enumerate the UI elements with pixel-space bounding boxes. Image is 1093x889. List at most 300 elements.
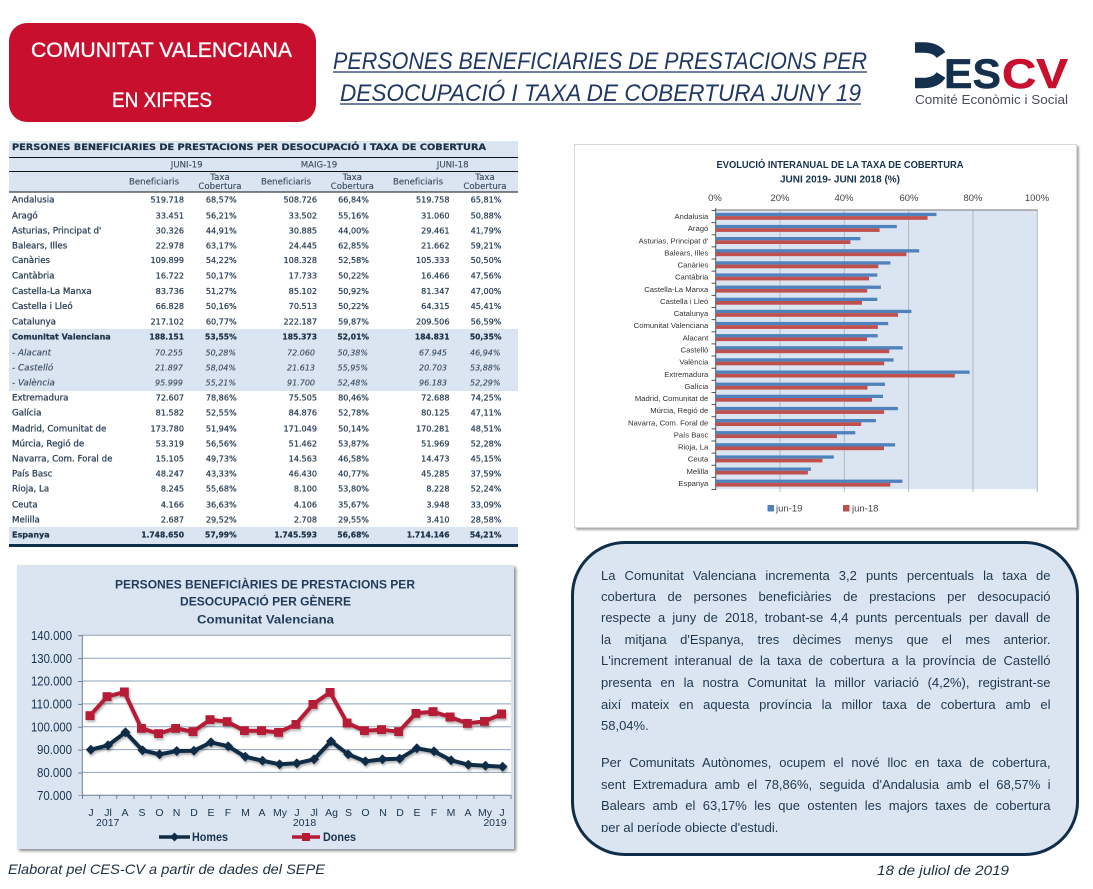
text block: commentary paragraph 2: Balears amb el 63,17% les que ostenten les majors taxes de cobertura [601, 798, 1050, 813]
header badge: Comunitat Valenciana en xifres: COMUNITAT VALENCIANA [31, 39, 292, 62]
bars: Múrcia [650, 406, 898, 415]
text block: commentary paragraph 1: cobertura de persones beneficiàries de prestacions per desocupació [601, 589, 1050, 604]
bars: Andalusia: Andalusia [675, 212, 709, 221]
row: Múrcia [12, 438, 502, 450]
row: Castella-La Manxa: 83.736 [156, 286, 184, 296]
table column headers: JUNI-18 [436, 160, 469, 170]
text block: commentary paragraph 1: així mateix en aquesta província la millor taxa de cobertura amb el [601, 697, 1050, 712]
footer: source and date: Elaborat pel CES-CV a partir de dades del SEPE [8, 861, 326, 877]
row: Castelló: - Castelló [12, 362, 54, 374]
table column headers: Beneficiaris [129, 178, 180, 188]
row: Madrid: 50,14% [338, 424, 369, 434]
row: Ceuta: 33,09% [471, 500, 502, 510]
row: Múrcia: 53.319 [156, 438, 184, 448]
row: Navarra: Navarra, Com. Foral de [12, 454, 112, 464]
row: Alacant: - Alacant [12, 348, 52, 358]
line chart x axis labels: A [121, 807, 129, 819]
row: València: 55,21% [205, 378, 236, 388]
bar chart percent axis [708, 193, 1050, 204]
line chart y axis labels: 70.000 [37, 789, 72, 803]
line chart x axis labels: My [273, 807, 288, 819]
row: Ceuta: 35,67% [338, 500, 369, 510]
footer: source and date: 18 de juliol de 2019 [877, 862, 1009, 878]
row: Galícia: 47,11% [471, 408, 502, 418]
row: Balears: 59,21% [471, 240, 502, 250]
row: Canàries: 50,50% [471, 255, 502, 265]
row: Navarra: 14.473 [421, 454, 450, 464]
row: Rioja: 55,68% [206, 484, 237, 494]
line chart x axis labels: A [258, 807, 266, 819]
bar chart legend: jun-19 [775, 504, 802, 514]
row: Castella-La Manxa [12, 286, 502, 297]
row: Cantàbria: Cantàbria [12, 272, 54, 282]
bars: Andalusia [675, 212, 936, 221]
bar chart percent axis: 0% [708, 193, 722, 204]
row: Aragó: 56,21% [206, 210, 237, 220]
row: Castella i Lleó: 50,16% [206, 301, 237, 311]
bars: Navarra [628, 418, 876, 427]
row: València: 95.999 [155, 378, 183, 388]
row: Navarra: 49,73% [206, 454, 237, 464]
table column headers: Cobertura [198, 182, 242, 192]
row: País Basc: 37,59% [471, 468, 502, 478]
row: Castella i Lleó [12, 301, 502, 312]
bar chart percent axis: 100% [1025, 193, 1050, 204]
line chart x axis labels: J [88, 807, 94, 819]
bars: Rioja [678, 442, 895, 452]
row: Canàries: 52,58% [338, 255, 369, 265]
row: Extremadura: 72.688 [421, 392, 450, 402]
line chart x axis labels: J [294, 807, 300, 819]
row: Castella-La Manxa: 50,92% [338, 286, 369, 296]
line chart y axis labels: 110.000 [31, 698, 72, 712]
line chart x axis labels: 2019 [483, 817, 507, 829]
row: Múrcia: 53,87% [338, 438, 369, 448]
line chart title: PERSONES BENEFICIÀRIES DE PRESTACIONS PER [115, 576, 415, 592]
row: Alacant: 50,28% [205, 348, 236, 358]
bars: Castella-La Manxa: Castella-La Manxa [644, 285, 709, 294]
bars: Melilla [687, 467, 811, 476]
text block: commentary paragraph 2: Per Comunitats Autònomes, ocupem el nové lloc en taxa de cobertura, [601, 755, 1050, 770]
bars: Galícia: Galícia [684, 382, 709, 391]
row: Espanya: 1.745.593 [274, 530, 317, 540]
row: Aragó: 33.451 [156, 210, 184, 220]
row: Aragó: 33.502 [289, 210, 317, 220]
row: Catalunya: 217.102 [151, 316, 184, 326]
table column headers: Taxa [474, 173, 495, 183]
row: Catalunya: 56,59% [471, 316, 502, 326]
row: Ceuta: 36,63% [206, 500, 237, 510]
row: Navarra: 15.105 [156, 454, 184, 464]
table title: PERSONES BENEFICIARIES DE PRESTACIONS PER DESOCUPACIÓ I TAXA DE COBERTURA [12, 141, 487, 152]
line chart x axis labels: J [499, 807, 505, 819]
line chart legend: Homes: Homes [192, 832, 228, 844]
bars: Catalunya [674, 309, 911, 318]
text block: commentary paragraph 2: sent Extremadura amb el 78,86%, seguida d'Andalusia amb el 68,57% i [601, 777, 1050, 792]
line chart y axis labels [31, 629, 72, 803]
row: Espanya [12, 530, 502, 540]
row: Andalusia: 65,81% [471, 194, 502, 204]
bars: Castella-La Manxa [644, 285, 881, 294]
panel: line chart background [17, 565, 514, 849]
row: País Basc: 46.430 [289, 468, 317, 478]
row: Canàries: 108.328 [284, 255, 317, 265]
row: Extremadura: 72.607 [156, 392, 184, 402]
row: Balears [12, 240, 502, 252]
row: Andalusia: Andalusia [12, 196, 54, 206]
row: Comunitat Valenciana: 53,55% [205, 332, 237, 342]
line chart x axis labels: F [431, 807, 437, 819]
row: Asturias: Asturias, Principat d' [12, 226, 101, 236]
row: Andalusia: 508.726 [284, 194, 317, 204]
text block: commentary paragraph 1 [601, 568, 1050, 733]
row: Ceuta [12, 500, 502, 510]
bars: Canàries: Canàries [678, 261, 708, 270]
line series: Dones [90, 692, 502, 734]
row: Rioja: 8.100 [294, 484, 317, 494]
line chart x axis labels: S [138, 807, 146, 819]
line chart x axis labels: O [361, 807, 370, 819]
row: Castelló: 53,88% [470, 364, 500, 372]
row: Madrid: 171.049 [284, 424, 317, 434]
line chart x axis labels [88, 807, 507, 829]
row: Canàries: 105.333 [416, 255, 450, 265]
row: Castella i Lleó: 70.513 [289, 301, 317, 311]
bars: Castelló: Castelló [681, 346, 708, 354]
row: Castelló: 55,95% [337, 364, 368, 372]
text block: commentary paragraph 1: L'increment interanual de la taxa de cobertura a la província de Castelló [601, 653, 1050, 668]
text block: commentary paragraph 2 [601, 755, 1050, 832]
row: Navarra: 14.563 [289, 454, 317, 464]
row: Múrcia: Múrcia, Regió de [12, 438, 84, 450]
bar chart percent axis: 60% [899, 193, 919, 204]
row: Comunitat Valenciana: 50,35% [470, 332, 502, 342]
line chart y axis labels: 80.000 [37, 766, 72, 780]
table column headers: Beneficiaris [261, 178, 312, 188]
row: València: 52,48% [337, 378, 368, 388]
row: Balears: 24.445 [289, 240, 317, 250]
bars: Espanya: Espanya [678, 479, 709, 488]
row: Alacant: 50,38% [337, 348, 368, 358]
row: Melilla: 28,58% [471, 514, 502, 524]
row: Canàries [12, 255, 502, 266]
row: Navarra: 46,58% [338, 454, 369, 464]
row: Madrid: 173.780 [151, 424, 184, 434]
bars: Asturias [638, 236, 860, 245]
bar chart title [716, 158, 964, 186]
row: Asturias: 30.885 [289, 226, 317, 236]
row: Comunitat Valenciana: 52,01% [337, 332, 369, 342]
row: Catalunya: 209.506 [416, 316, 450, 326]
row: Melilla: 29,55% [338, 514, 369, 524]
row: Andalusia [12, 194, 502, 206]
row: Extremadura: 75.505 [289, 392, 317, 402]
bars: Extremadura [664, 370, 970, 379]
row: Ceuta: Ceuta [12, 500, 38, 510]
main title: PERSONES BENEFICIARIES DE PRESTACIONS PER [333, 48, 867, 75]
row: Múrcia: 51.969 [421, 438, 450, 448]
row: Catalunya: 59,87% [338, 316, 369, 326]
row: Castella-La Manxa: 51,27% [206, 286, 237, 296]
bars: Múrcia: Múrcia, Regió de [650, 406, 708, 415]
row: Catalunya [12, 316, 502, 328]
row: Rioja: 53,80% [338, 484, 369, 494]
table column headers: MAIG-19 [301, 160, 337, 170]
row: Melilla [12, 514, 502, 526]
row: País Basc: 43,33% [206, 468, 237, 478]
bars: Melilla: Melilla [687, 467, 709, 476]
bar chart title: EVOLUCIÓ INTERANUAL DE LA TAXA DE COBERTURA [716, 158, 964, 171]
bar chart legend: jun-18 [851, 504, 878, 514]
table column headers: Cobertura [463, 182, 507, 192]
row: Ceuta: 3.948 [426, 500, 450, 510]
row: Galícia: 52,78% [338, 408, 369, 418]
bars: Alacant [683, 333, 878, 342]
line chart x axis labels: O [155, 807, 164, 819]
row: Extremadura: 74,25% [471, 392, 502, 402]
row: Andalusia: 519.758 [416, 194, 450, 204]
row: Castelló: 20.703 [419, 364, 447, 372]
text block: commentary paragraph 1: presenta en la nostra Comunitat la millor variació (4,2%), registrant-se [601, 675, 1050, 690]
table column headers: Beneficiaris [393, 178, 444, 188]
bar chart title: JUNI 2019- JUNI 2018 (%) [780, 174, 900, 186]
line chart y axis labels: 130.000 [31, 652, 72, 666]
bars: Madrid: Madrid, Comunitat de [635, 394, 708, 403]
row: Castella i Lleó: 66.828 [156, 301, 184, 311]
row: Catalunya: 222.187 [284, 316, 317, 326]
text block: commentary paragraph 1: respecte a juny de 2018, trobant-se 4,4 punts percentuals per davall de [601, 610, 1050, 625]
row: Cantàbria: 50,22% [338, 270, 369, 280]
row: Balears: 63,17% [206, 240, 237, 250]
bar chart percent axis: 80% [963, 193, 983, 204]
row: Cantàbria: 47,56% [471, 270, 502, 280]
row: Canàries: 54,22% [206, 255, 237, 265]
main title: DESOCUPACIÓ I TAXA DE COBERTURA JUNY 19 [340, 80, 861, 107]
table column headers [129, 160, 507, 192]
row: Alacant: 72.060 [287, 348, 315, 358]
row: Andalusia: 68,57% [206, 194, 237, 204]
row: València: - València [12, 378, 55, 388]
row: Madrid: 48,51% [471, 424, 502, 434]
row: Castella-La Manxa: 85.102 [289, 286, 317, 296]
line chart x axis labels: Ag [325, 807, 338, 819]
row: Canàries: Canàries [12, 256, 51, 266]
row: Rioja: 8.245 [161, 484, 184, 494]
row: Alacant: 67.945 [419, 348, 447, 358]
row: Galícia: Galícia [12, 408, 41, 418]
bars: Ceuta: Ceuta [688, 455, 709, 464]
row: Castella i Lleó: 50,22% [338, 301, 369, 311]
row: Castella i Lleó: 45,41% [471, 301, 502, 311]
row: Castella i Lleó: 64.315 [421, 301, 450, 311]
row: Balears: 21.662 [421, 240, 450, 250]
row: Múrcia: 51.462 [289, 438, 317, 448]
row: Castelló: 21.613 [287, 364, 315, 372]
line chart x axis labels: 2017 [96, 817, 120, 829]
row: Melilla: 3.410 [426, 514, 450, 524]
bars: Extremadura: Extremadura [664, 370, 709, 379]
row: Aragó: 55,16% [338, 210, 369, 220]
row: València: 52,29% [470, 378, 500, 388]
line chart x axis labels: D [190, 807, 198, 819]
row: Espanya: Espanya [12, 530, 50, 540]
bars: Espanya [678, 479, 902, 488]
row: Rioja: 52,24% [471, 484, 502, 494]
line chart y axis labels: 100.000 [31, 720, 72, 734]
bars: Navarra: Navarra, Com. Foral de [628, 418, 708, 427]
row: Balears: 62,85% [338, 240, 369, 250]
line chart x axis labels: Jl [310, 807, 318, 819]
row: Melilla: 2.708 [294, 514, 317, 524]
row: Extremadura: 78,86% [206, 392, 237, 402]
row: Alacant [12, 348, 500, 358]
line chart title [115, 576, 415, 626]
row: Múrcia: 52,28% [471, 438, 502, 448]
row: Espanya: 1.714.146 [407, 530, 450, 540]
logo: CES CV: ES [944, 50, 1001, 97]
row: Madrid: 170.281 [416, 424, 450, 434]
line chart x axis labels: A [464, 807, 472, 819]
line series: Homes [91, 732, 503, 767]
row: Aragó: 50,88% [471, 210, 502, 220]
text block: commentary paragraph 1: La Comunitat Valenciana incrementa 3,2 punts percentuals la taxa de [601, 568, 1050, 582]
row: Asturias: 44,91% [206, 226, 237, 236]
line chart x axis labels: E [413, 807, 421, 819]
row: Extremadura: 80,46% [338, 392, 369, 402]
row: Espanya: 56,68% [337, 530, 369, 540]
row: Múrcia: 56,56% [206, 438, 237, 448]
line chart y axis labels: 140.000 [31, 629, 72, 643]
row: Espanya: 1.748.650 [141, 530, 184, 540]
table column headers: Taxa [209, 173, 230, 183]
row: Navarra: 45,15% [471, 454, 502, 464]
text block: commentary paragraph 1: 58,04%. [601, 718, 649, 733]
row: Andalusia: 66,84% [338, 194, 369, 204]
line chart x axis labels: M [241, 807, 250, 819]
bars: País Basc: País Basc [674, 430, 708, 439]
line chart x axis labels: Jl [104, 807, 112, 819]
row: Comunitat Valenciana: 185.373 [282, 332, 317, 342]
text block: commentary paragraph 1: la mitjana d'Espanya, tres dècimes menys que el mes anterior. [601, 632, 1050, 647]
row: Cantàbria: 50,17% [206, 270, 237, 280]
line chart x axis labels: S [345, 807, 352, 819]
row: Melilla: 29,52% [206, 514, 237, 524]
line chart x axis labels: N [379, 807, 387, 819]
row: Madrid [12, 424, 502, 434]
row: Aragó [12, 210, 502, 222]
row: Asturias [12, 226, 502, 236]
line chart y axis labels: 90.000 [37, 743, 72, 757]
row: Melilla: Melilla [12, 516, 40, 526]
row: País Basc: País Basc [12, 470, 53, 480]
row: Galícia: 52,55% [206, 408, 237, 418]
bars: Cantàbria [675, 273, 877, 282]
bars: Comunitat Valenciana: Comunitat Valenciana [634, 321, 709, 330]
line chart x axis labels: F [225, 807, 231, 819]
row: Aragó: Aragó [12, 210, 38, 222]
bars: Castella i Lleó: Castella i Lleó [660, 297, 708, 306]
row: Alacant: 70.255 [155, 348, 183, 358]
row: Madrid: 51,94% [206, 424, 237, 434]
row: Madrid: Madrid, Comunitat de [12, 424, 106, 434]
line chart title: Comunitat Valenciana [197, 612, 334, 626]
row: Balears: 22.978 [156, 240, 184, 250]
table column headers: Taxa [342, 173, 362, 183]
bars: València [679, 358, 894, 367]
row: Catalunya: 60,77% [206, 316, 237, 326]
line chart x axis labels: M [447, 807, 455, 819]
row: Navarra [12, 454, 502, 464]
bars: Balears: Balears, Illes [664, 248, 708, 258]
row: València: 91.700 [287, 378, 315, 388]
bar chart percent axis: 40% [834, 193, 854, 204]
row: Espanya: 57,99% [205, 530, 237, 540]
line chart legend: Dones: Dones [323, 832, 356, 844]
line chart legend: Homes [159, 832, 228, 844]
row: Comunitat Valenciana: Comunitat Valenciana [12, 332, 111, 342]
row: Castelló: 21.897 [155, 364, 184, 372]
line chart title: DESOCUPACIÓ PER GÈNERE [180, 594, 351, 608]
line chart y axis labels: 120.000 [31, 675, 72, 689]
bars: Canàries [678, 261, 890, 270]
row: Asturias: 44,00% [338, 226, 369, 236]
row: Cantàbria: 17.733 [289, 270, 317, 280]
row: Andalusia: 519.718 [151, 194, 184, 204]
bars: Alacant: Alacant [683, 333, 709, 342]
row: Balears: Balears, Illes [12, 242, 68, 252]
row: Galícia: 80.125 [421, 408, 450, 418]
row: Rioja [12, 484, 502, 494]
row: Cantàbria: 16.722 [156, 270, 184, 280]
row: Asturias: 29.461 [421, 226, 450, 236]
row: Asturias: 30.326 [156, 226, 184, 236]
row: Galícia [12, 408, 502, 418]
row: Cantàbria: 16.466 [421, 270, 450, 280]
row: Aragó: 31.060 [421, 210, 450, 220]
row: Castella-La Manxa: 81.347 [421, 286, 450, 296]
row: País Basc: 48.247 [156, 468, 184, 478]
row: Ceuta: 4.166 [161, 500, 184, 510]
logo: CES CV: CV [1002, 50, 1068, 97]
row: València [12, 378, 500, 388]
bars: País Basc [674, 430, 855, 439]
table column headers: JUNI-19 [170, 160, 203, 170]
row: Comunitat Valenciana [12, 332, 502, 342]
line chart legend: Dones [292, 832, 356, 844]
row: País Basc: 40,77% [338, 468, 369, 478]
row: Castelló [12, 362, 500, 374]
line chart x axis labels: E [207, 807, 215, 819]
row: Asturias: 41,79% [471, 226, 502, 236]
bars: Aragó [688, 224, 897, 233]
bars: Castelló [681, 346, 903, 354]
bar chart percent axis: 20% [770, 193, 790, 204]
row: Ceuta: 4.106 [294, 500, 317, 510]
bars: Catalunya: Catalunya [674, 309, 709, 318]
row: Alacant: 46,94% [470, 348, 500, 358]
panel: bar chart of coverage rate [574, 144, 1077, 528]
row: Espanya: 54,21% [470, 530, 502, 540]
bars: Cantàbria: Cantàbria [675, 273, 709, 282]
row: Castella-La Manxa: Castella-La Manxa [12, 287, 92, 297]
logo: CES CV: Comité Econòmic i Social [915, 93, 1068, 107]
row: Comunitat Valenciana: 188.151 [149, 332, 184, 342]
row: Rioja: Rioja, La [12, 484, 49, 494]
line chart x axis labels: 2018 [293, 817, 316, 829]
bars: Comunitat Valenciana [634, 321, 888, 330]
header badge: Comunitat Valenciana en xifres: EN XIFRES [112, 89, 212, 112]
row: Extremadura [12, 392, 502, 404]
